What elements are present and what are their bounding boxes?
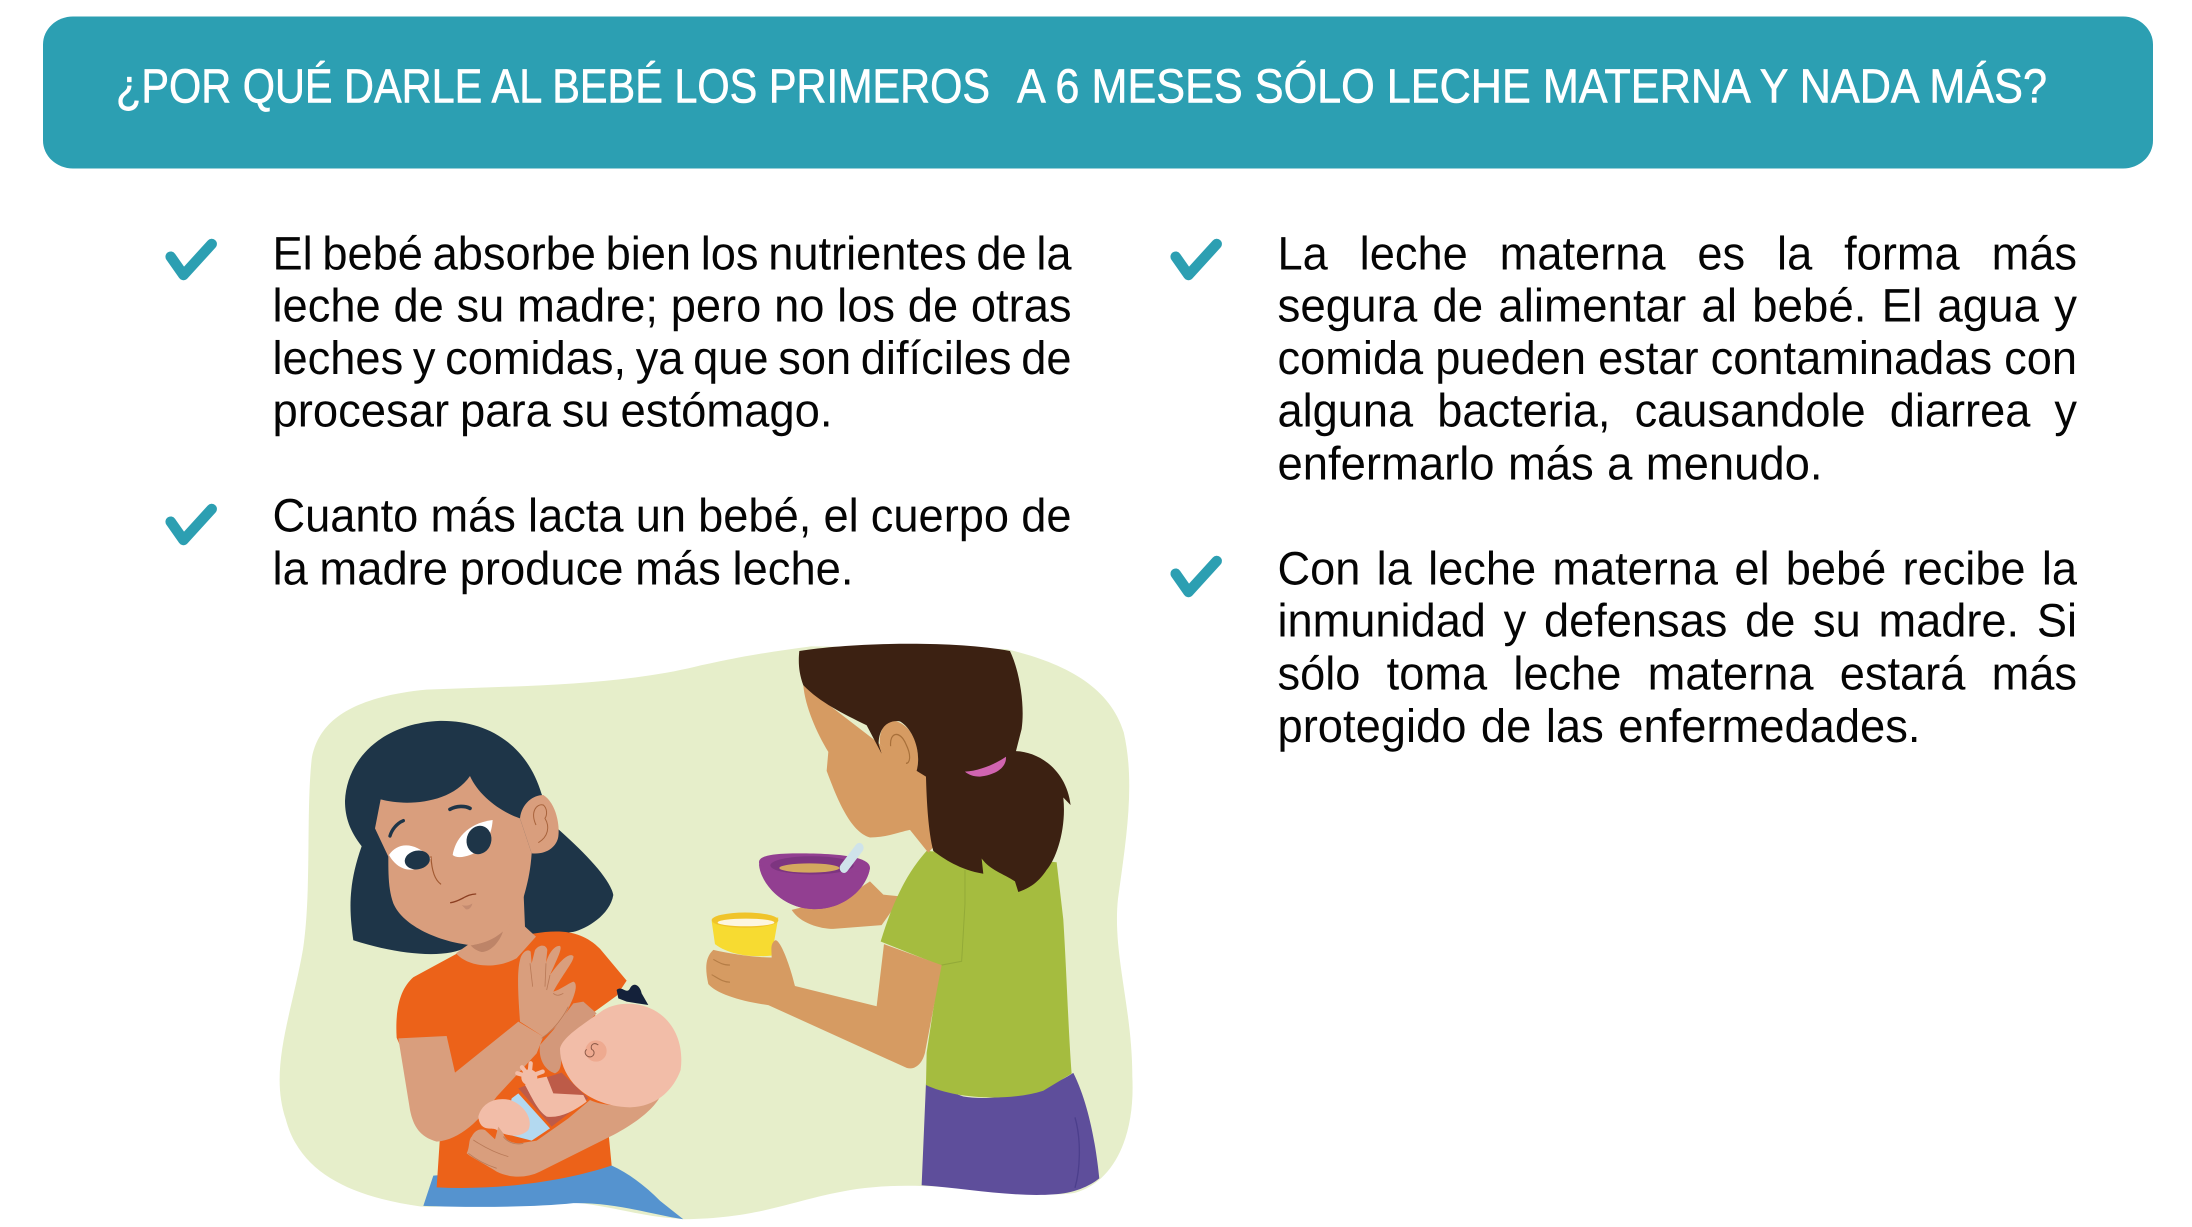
woman ear bbox=[880, 721, 918, 773]
eyes bbox=[453, 820, 493, 857]
baby shirt bbox=[518, 1073, 588, 1127]
header banner bbox=[43, 16, 2153, 168]
text block: absorption of nutrients: procesar para su estómago. bbox=[272, 383, 832, 436]
text block: immunity and defenses: protegido de las enfermedades. bbox=[1278, 699, 1920, 752]
background blob bbox=[280, 646, 1133, 1219]
text block: immunity and defenses: Con la leche materna el bebé recibe la bbox=[1278, 541, 2078, 594]
text block: safest way to feed: segura de alimentar al bebé. El agua y bbox=[1278, 278, 2077, 332]
mother hand bbox=[518, 946, 576, 1037]
woman green shirt bbox=[881, 851, 1072, 1098]
mother arms and baby bbox=[398, 946, 681, 1177]
neck bbox=[456, 887, 536, 966]
woman face and neck bbox=[803, 685, 937, 853]
woman offering food bbox=[706, 644, 1099, 1195]
text block: safest way to feed: comida pueden estar contaminadas con bbox=[1278, 331, 2077, 384]
mother head bbox=[375, 776, 559, 966]
text block: safest way to feed: alguna bacteria, causandole diarrea y bbox=[1278, 383, 2077, 436]
woman hair band bbox=[965, 757, 1006, 777]
mother hair, skirt and shirt bbox=[345, 721, 683, 1219]
baby leg bbox=[478, 1099, 530, 1136]
woman purple skirt bbox=[922, 1073, 1099, 1195]
bowl with soup and spoon bbox=[759, 848, 870, 909]
nose and mouth bbox=[431, 857, 441, 884]
woman hair bbox=[799, 644, 1071, 892]
text block: immunity and defenses: sólo toma leche materna estará más bbox=[1278, 646, 2077, 699]
icon: check 2 bbox=[171, 509, 212, 540]
text block: absorption of nutrients: leche de su madre; pero no los de otras bbox=[272, 278, 1072, 332]
text block: more nursing more milk bbox=[272, 489, 1072, 594]
text block: immunity and defenses: inmunidad y defensas de su madre. Si bbox=[1278, 594, 2077, 647]
baby ear bbox=[585, 1040, 607, 1062]
brows bbox=[450, 806, 470, 809]
title: A 6 MESES SÓLO LECHE MATERNA Y NADA MÁS? bbox=[1017, 60, 2047, 114]
icon: check 4 bbox=[1176, 561, 1217, 592]
mother with baby bbox=[345, 721, 683, 1219]
yellow cup with milk bbox=[712, 913, 778, 956]
text block: more nursing more milk: Cuanto más lacta un bebé, el cuerpo de bbox=[272, 489, 1072, 542]
face bbox=[375, 776, 532, 945]
ear bbox=[520, 795, 559, 854]
chest bbox=[540, 1002, 597, 1073]
text block: immunity and defenses bbox=[1278, 541, 2078, 752]
icon: check 3 bbox=[1176, 244, 1217, 275]
raised arm bbox=[398, 1022, 543, 1142]
illustration: mother, baby and woman offering food bbox=[280, 644, 1133, 1219]
text block: safest way to feed: enfermarlo más a menudo. bbox=[1278, 436, 1822, 489]
baby diaper bbox=[503, 1093, 550, 1141]
baby arm bbox=[525, 1077, 587, 1117]
text block: absorption of nutrients: El bebé absorbe bien los nutrientes de la bbox=[272, 226, 1072, 279]
baby hair bbox=[617, 985, 648, 1005]
icon: check 1 bbox=[171, 244, 212, 275]
woman near arm and hand bbox=[706, 940, 942, 1068]
text block: absorption of nutrients bbox=[272, 226, 1072, 436]
mother supporting arm bbox=[467, 1093, 662, 1177]
text block: absorption of nutrients: leches y comidas, ya que son difíciles de bbox=[272, 331, 1072, 384]
text block: safest way to feed bbox=[1278, 226, 2077, 489]
text block: safest way to feed: La leche materna es la forma más bbox=[1278, 226, 2077, 279]
woman far arm bbox=[792, 881, 902, 929]
title bbox=[116, 60, 2047, 114]
baby head bbox=[560, 1004, 681, 1107]
title: ¿POR QUÉ DARLE AL BEBÉ LOS PRIMEROS bbox=[116, 60, 990, 114]
text block: more nursing more milk: la madre produce más leche. bbox=[272, 541, 854, 594]
